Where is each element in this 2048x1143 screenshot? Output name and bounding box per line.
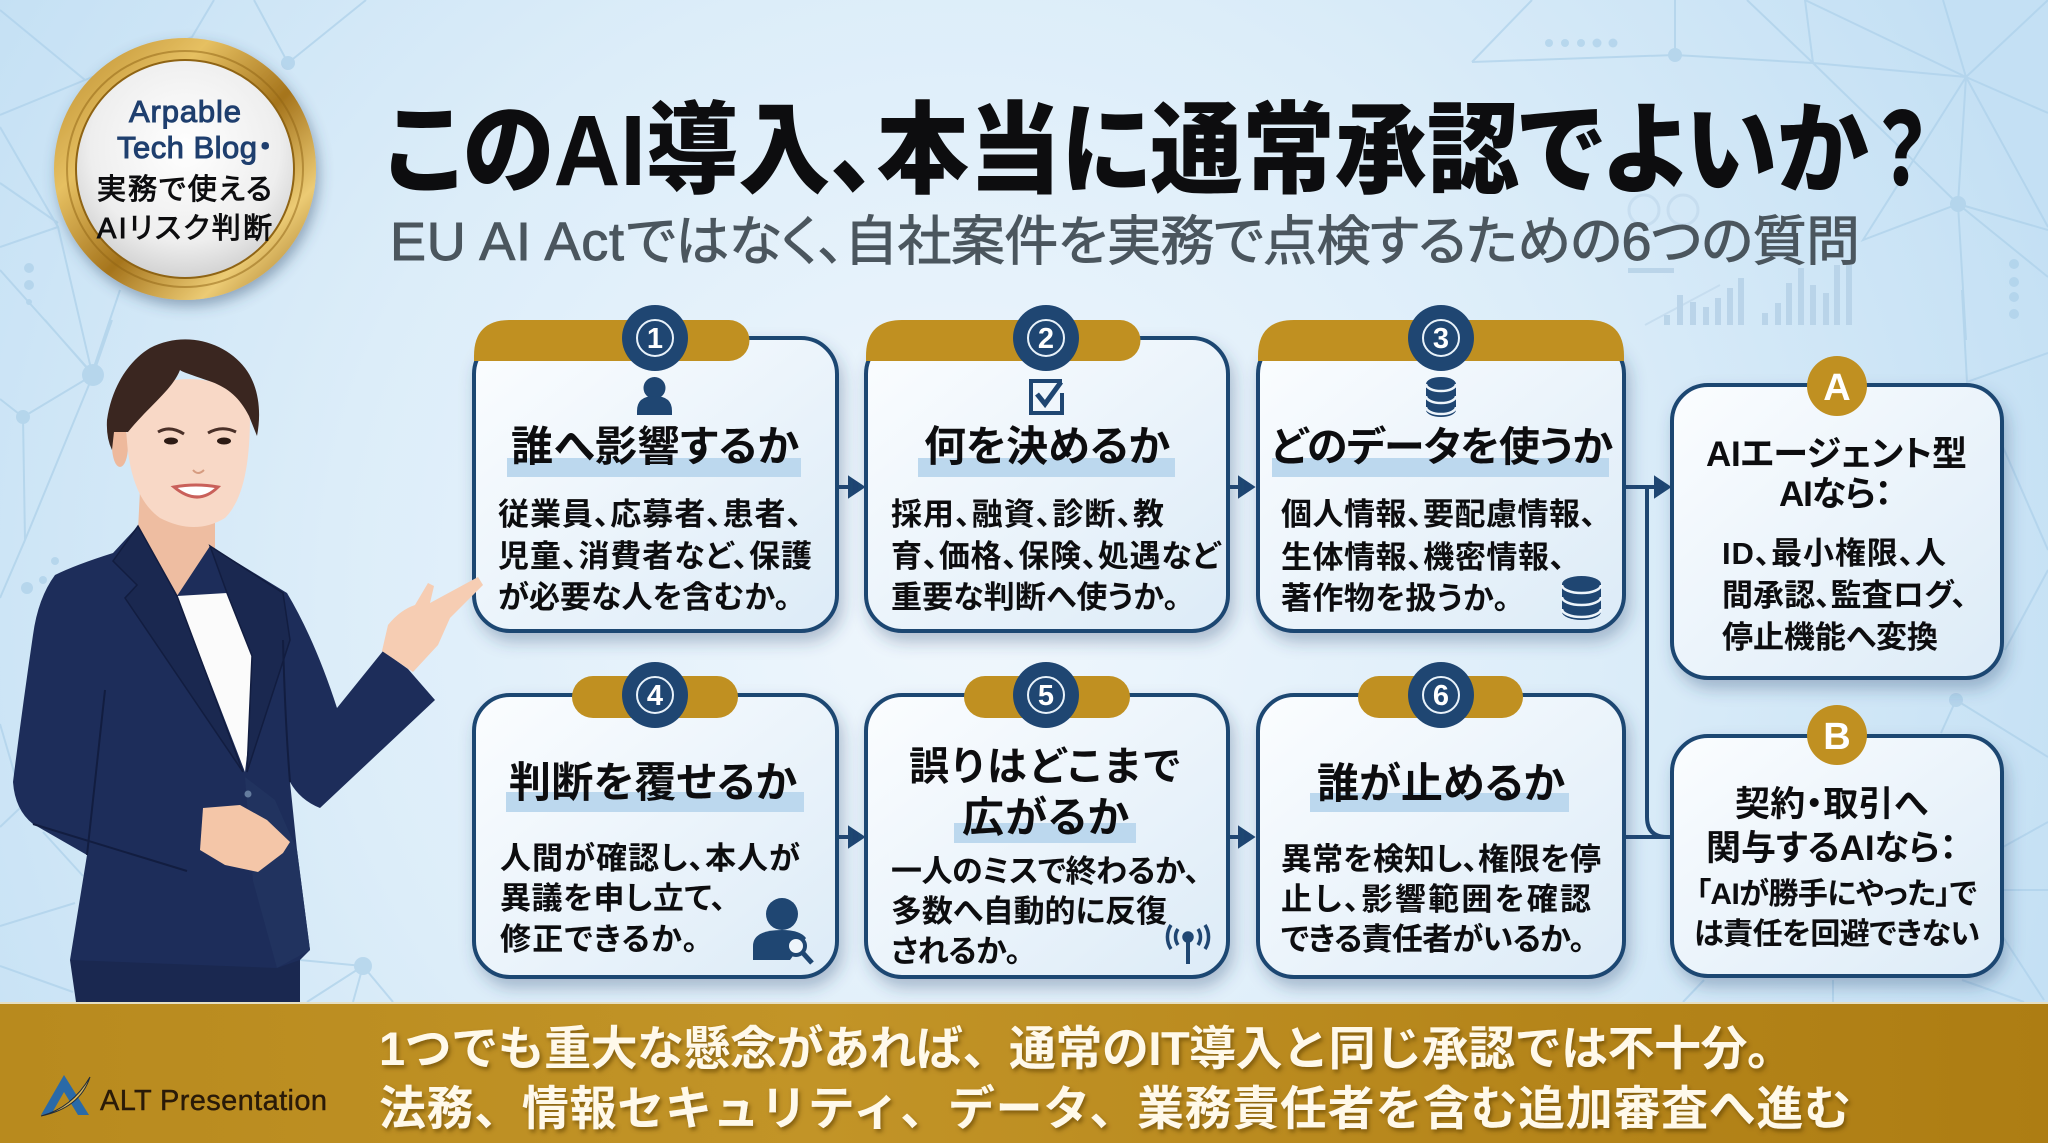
card 5: されるか。 <box>891 934 1021 969</box>
faint analytics chart <box>1628 195 1852 325</box>
bottom band <box>0 1002 2048 1143</box>
card 4: 修正できるか。 <box>500 922 698 957</box>
card 3: 著作物を扱うか。 <box>1281 581 1509 616</box>
card 1: 誰へ影響するか <box>511 423 799 470</box>
shirt <box>177 593 252 772</box>
panel A: AI agent: AIなら： <box>1779 475 1892 514</box>
card 5 <box>866 662 1228 977</box>
card 1: 1 <box>647 323 663 355</box>
panel A: AI agent: 間承認、監査ログ、 <box>1722 578 1967 613</box>
card 3: どのデータを使うか <box>1271 424 1613 470</box>
card 6 <box>1258 662 1624 977</box>
connector arrows <box>837 479 1672 845</box>
card 3 <box>1258 305 1624 631</box>
right hand <box>382 577 483 672</box>
panel A: AI agent: 停止機能へ変換 <box>1722 620 1938 655</box>
connector: card 6 to panel B <box>1624 487 1672 837</box>
panel B: contracts: は責任を回避できない <box>1694 918 1980 951</box>
card 1: 児童、消費者など、保護 <box>498 539 812 574</box>
card 6: できる責任者がいるか。 <box>1281 922 1585 957</box>
head <box>107 339 259 527</box>
subtitle: EU AI Act <box>390 212 624 272</box>
panel A: AI agent: ID、最小権限、人 <box>1722 536 1946 571</box>
card 5: 多数へ自動的に反復 <box>891 894 1167 929</box>
panel B: contracts: 関与するAIなら： <box>1706 829 1957 868</box>
suit <box>13 526 435 1002</box>
card 5: 5 <box>1038 680 1054 712</box>
icon: database <box>1426 377 1456 417</box>
panel A: AI agent: A <box>1823 367 1851 409</box>
card 6: 6 <box>1433 680 1449 712</box>
badge: Arpable Tech Blog: Tech Blog・ <box>117 130 273 165</box>
band message: 法務、情報セキュリティ、データ、業務責任者を含む追加審査へ進む <box>379 1082 1851 1135</box>
title: このAI導入、本当に通常承認でよいか <box>385 95 1869 207</box>
panel B: contracts: 「AIが勝手にやった」で <box>1696 877 1977 911</box>
card 3: 3 <box>1433 323 1449 355</box>
subtitle: ではなく、自社案件を実務で点検するための6つの質問 <box>626 212 1860 272</box>
band message: 1つでも重大な懸念があれば、通常のIT導入と同じ承認では不十分。 <box>379 1022 1794 1075</box>
arrow: card 3 to panel A <box>1624 479 1668 495</box>
card 2: 採用、融資、診断、教 <box>891 497 1164 532</box>
card 1 <box>474 305 837 631</box>
panel B: contracts <box>1672 705 2002 976</box>
card 3: 生体情報、機密情報、 <box>1281 540 1565 575</box>
panel A: AI agent <box>1672 356 2002 678</box>
card 5: 一人のミスで終わるか、 <box>891 854 1200 889</box>
left hand <box>200 805 290 872</box>
icon: database small <box>1562 576 1601 620</box>
badge: Arpable Tech Blog <box>54 38 316 300</box>
card 2 <box>866 305 1228 631</box>
card 4: 判断を覆せるか <box>509 759 797 806</box>
logo: ALT Presentation: ALT Presentation <box>100 1085 327 1117</box>
icon: checkbox <box>1031 381 1062 413</box>
card 1: が必要な人を含むか。 <box>498 580 790 615</box>
panel B: contracts: B <box>1823 716 1851 758</box>
card 4: 4 <box>647 680 663 712</box>
arrow: card 1 to card 2 <box>837 479 862 495</box>
card 5: 広がるか <box>962 794 1129 841</box>
card 4 <box>474 662 837 977</box>
card 3: 個人情報、要配慮情報、 <box>1281 497 1596 532</box>
sleeve seams <box>33 640 290 871</box>
card 2: 重要な判断へ使うか。 <box>891 580 1179 615</box>
neck <box>138 490 215 600</box>
card 4: 異議を申し立て、 <box>500 881 726 916</box>
presenter figure <box>13 339 483 1002</box>
badge: Arpable Tech Blog: Arpable <box>129 94 241 129</box>
card 5: 誤りはどこまで <box>909 745 1180 789</box>
title: ？ <box>1877 95 1927 207</box>
card 4: 人間が確認し、本人が <box>500 841 800 876</box>
logo: ALT Presentation <box>41 1075 327 1117</box>
icon: person with magnifier <box>753 898 812 963</box>
card 2: 育、価格、保険、処遇など <box>891 539 1222 574</box>
card 2: 何を決めるか <box>924 423 1170 470</box>
band message <box>379 1022 1851 1135</box>
badge: Arpable Tech Blog: AIリスク判断 <box>97 212 272 245</box>
card 6: 異常を検知し、権限を停 <box>1281 842 1601 877</box>
card 1: 従業員、応募者、患者、 <box>498 497 802 532</box>
arrow: card 4 to card 5 <box>837 829 862 845</box>
panel A: AI agent: AIエージェント型 <box>1706 435 1967 474</box>
icon: person <box>637 377 672 415</box>
arrow: card 2 to card 3 <box>1228 479 1252 495</box>
card 6: 止し、影響範囲を確認 <box>1281 882 1591 917</box>
card 2: 2 <box>1038 323 1054 355</box>
arrow: card 5 to card 6 <box>1228 829 1252 845</box>
card 6: 誰が止めるか <box>1317 760 1565 807</box>
panel B: contracts: 契約・取引へ <box>1735 785 1928 824</box>
lapels <box>113 526 290 772</box>
icon: antenna <box>1167 925 1209 964</box>
jacket front <box>245 777 310 968</box>
badge: Arpable Tech Blog: 実務で使える <box>97 173 272 206</box>
